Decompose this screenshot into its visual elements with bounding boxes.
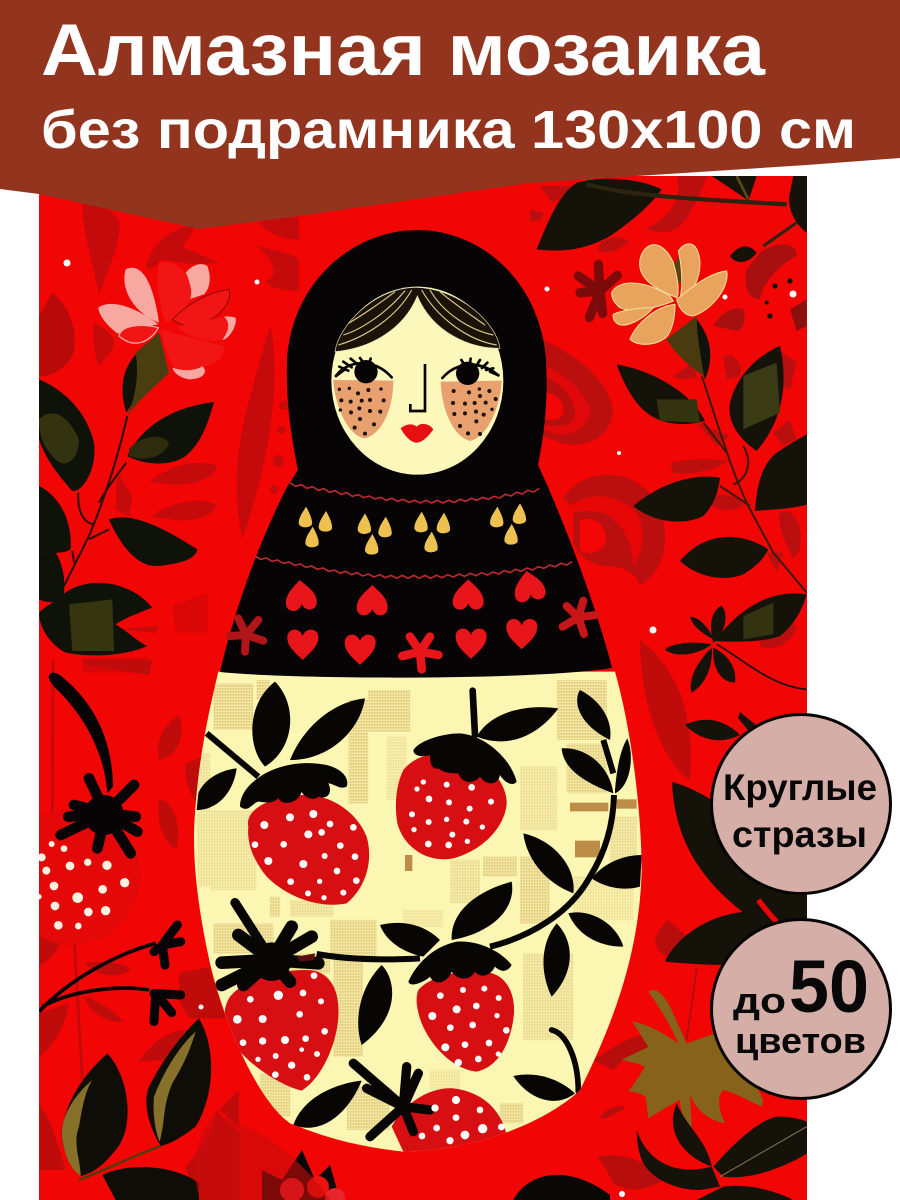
badge: round rhinestones — [712, 714, 890, 894]
olive striped leaves — [62, 1018, 211, 1200]
background foliage, dark red — [39, 660, 239, 1200]
background foliage, dark red — [39, 203, 299, 673]
lower left panel of the picture — [39, 660, 239, 1200]
doll: black hood and upper body — [220, 230, 612, 678]
artwork: painted background — [4, 176, 810, 1200]
black leaves bottom — [637, 1103, 807, 1200]
doll: embroidery pattern — [230, 483, 596, 669]
mid right leaves — [640, 640, 807, 950]
orange flower — [612, 244, 727, 344]
title line 2: без подрамника 130х100 см — [41, 100, 856, 160]
cheeks with freckles — [333, 380, 502, 441]
red background shapes — [593, 920, 697, 1189]
strawberry 1 — [240, 763, 369, 905]
strawberry 2 — [396, 733, 517, 859]
hair — [335, 287, 500, 352]
right branch leaves — [617, 346, 810, 693]
left branch leaves — [39, 379, 214, 655]
zigzag lines — [255, 483, 572, 578]
nose — [410, 364, 425, 411]
badge: up to 50 colours: цветов — [735, 1020, 866, 1061]
brown autumn leaf — [622, 990, 763, 1130]
lips — [401, 424, 433, 443]
strawberry 3 — [222, 903, 339, 1091]
gold drops — [299, 503, 526, 555]
doll: face — [331, 287, 503, 475]
upper right panel of the picture with orange flower — [530, 176, 810, 693]
lower right panel of the picture — [593, 900, 807, 1200]
title line 1: Алмазная мозаика — [41, 10, 767, 91]
eyes — [336, 358, 498, 385]
hearts — [284, 568, 547, 665]
strawberry 4 — [408, 941, 514, 1072]
pink flower — [98, 262, 236, 379]
badge: round rhinestones: Круглые — [723, 767, 877, 808]
asterisk flowers — [402, 637, 438, 669]
vine and leaves — [197, 682, 642, 1128]
top leaves and branch — [537, 176, 810, 319]
white dots — [64, 260, 796, 1197]
bottom flower — [195, 1115, 610, 1200]
flower stem — [667, 316, 710, 379]
title — [41, 10, 856, 160]
badge: up to 50 colours — [712, 920, 890, 1098]
black sprigs — [39, 925, 181, 1022]
strawberry 5 — [353, 1063, 507, 1152]
left strawberry — [39, 672, 143, 945]
badge: up to 50 colours: до — [733, 980, 786, 1021]
upper left panel of the picture with pink flower — [39, 203, 299, 673]
matryoshka doll — [194, 230, 642, 1152]
swirl near hood — [542, 336, 613, 445]
badge: round rhinestones: стразы — [732, 814, 867, 855]
badge: up to 50 colours: 50 — [789, 945, 869, 1028]
background foliage, dark red — [530, 176, 807, 648]
black leaves top — [665, 898, 778, 966]
swirl lower — [563, 475, 665, 586]
flower stem and calyx — [123, 333, 169, 416]
header ribbon — [0, 0, 900, 229]
doll: lower cream body with strawberries — [194, 672, 642, 1152]
small dark flower — [578, 264, 617, 318]
